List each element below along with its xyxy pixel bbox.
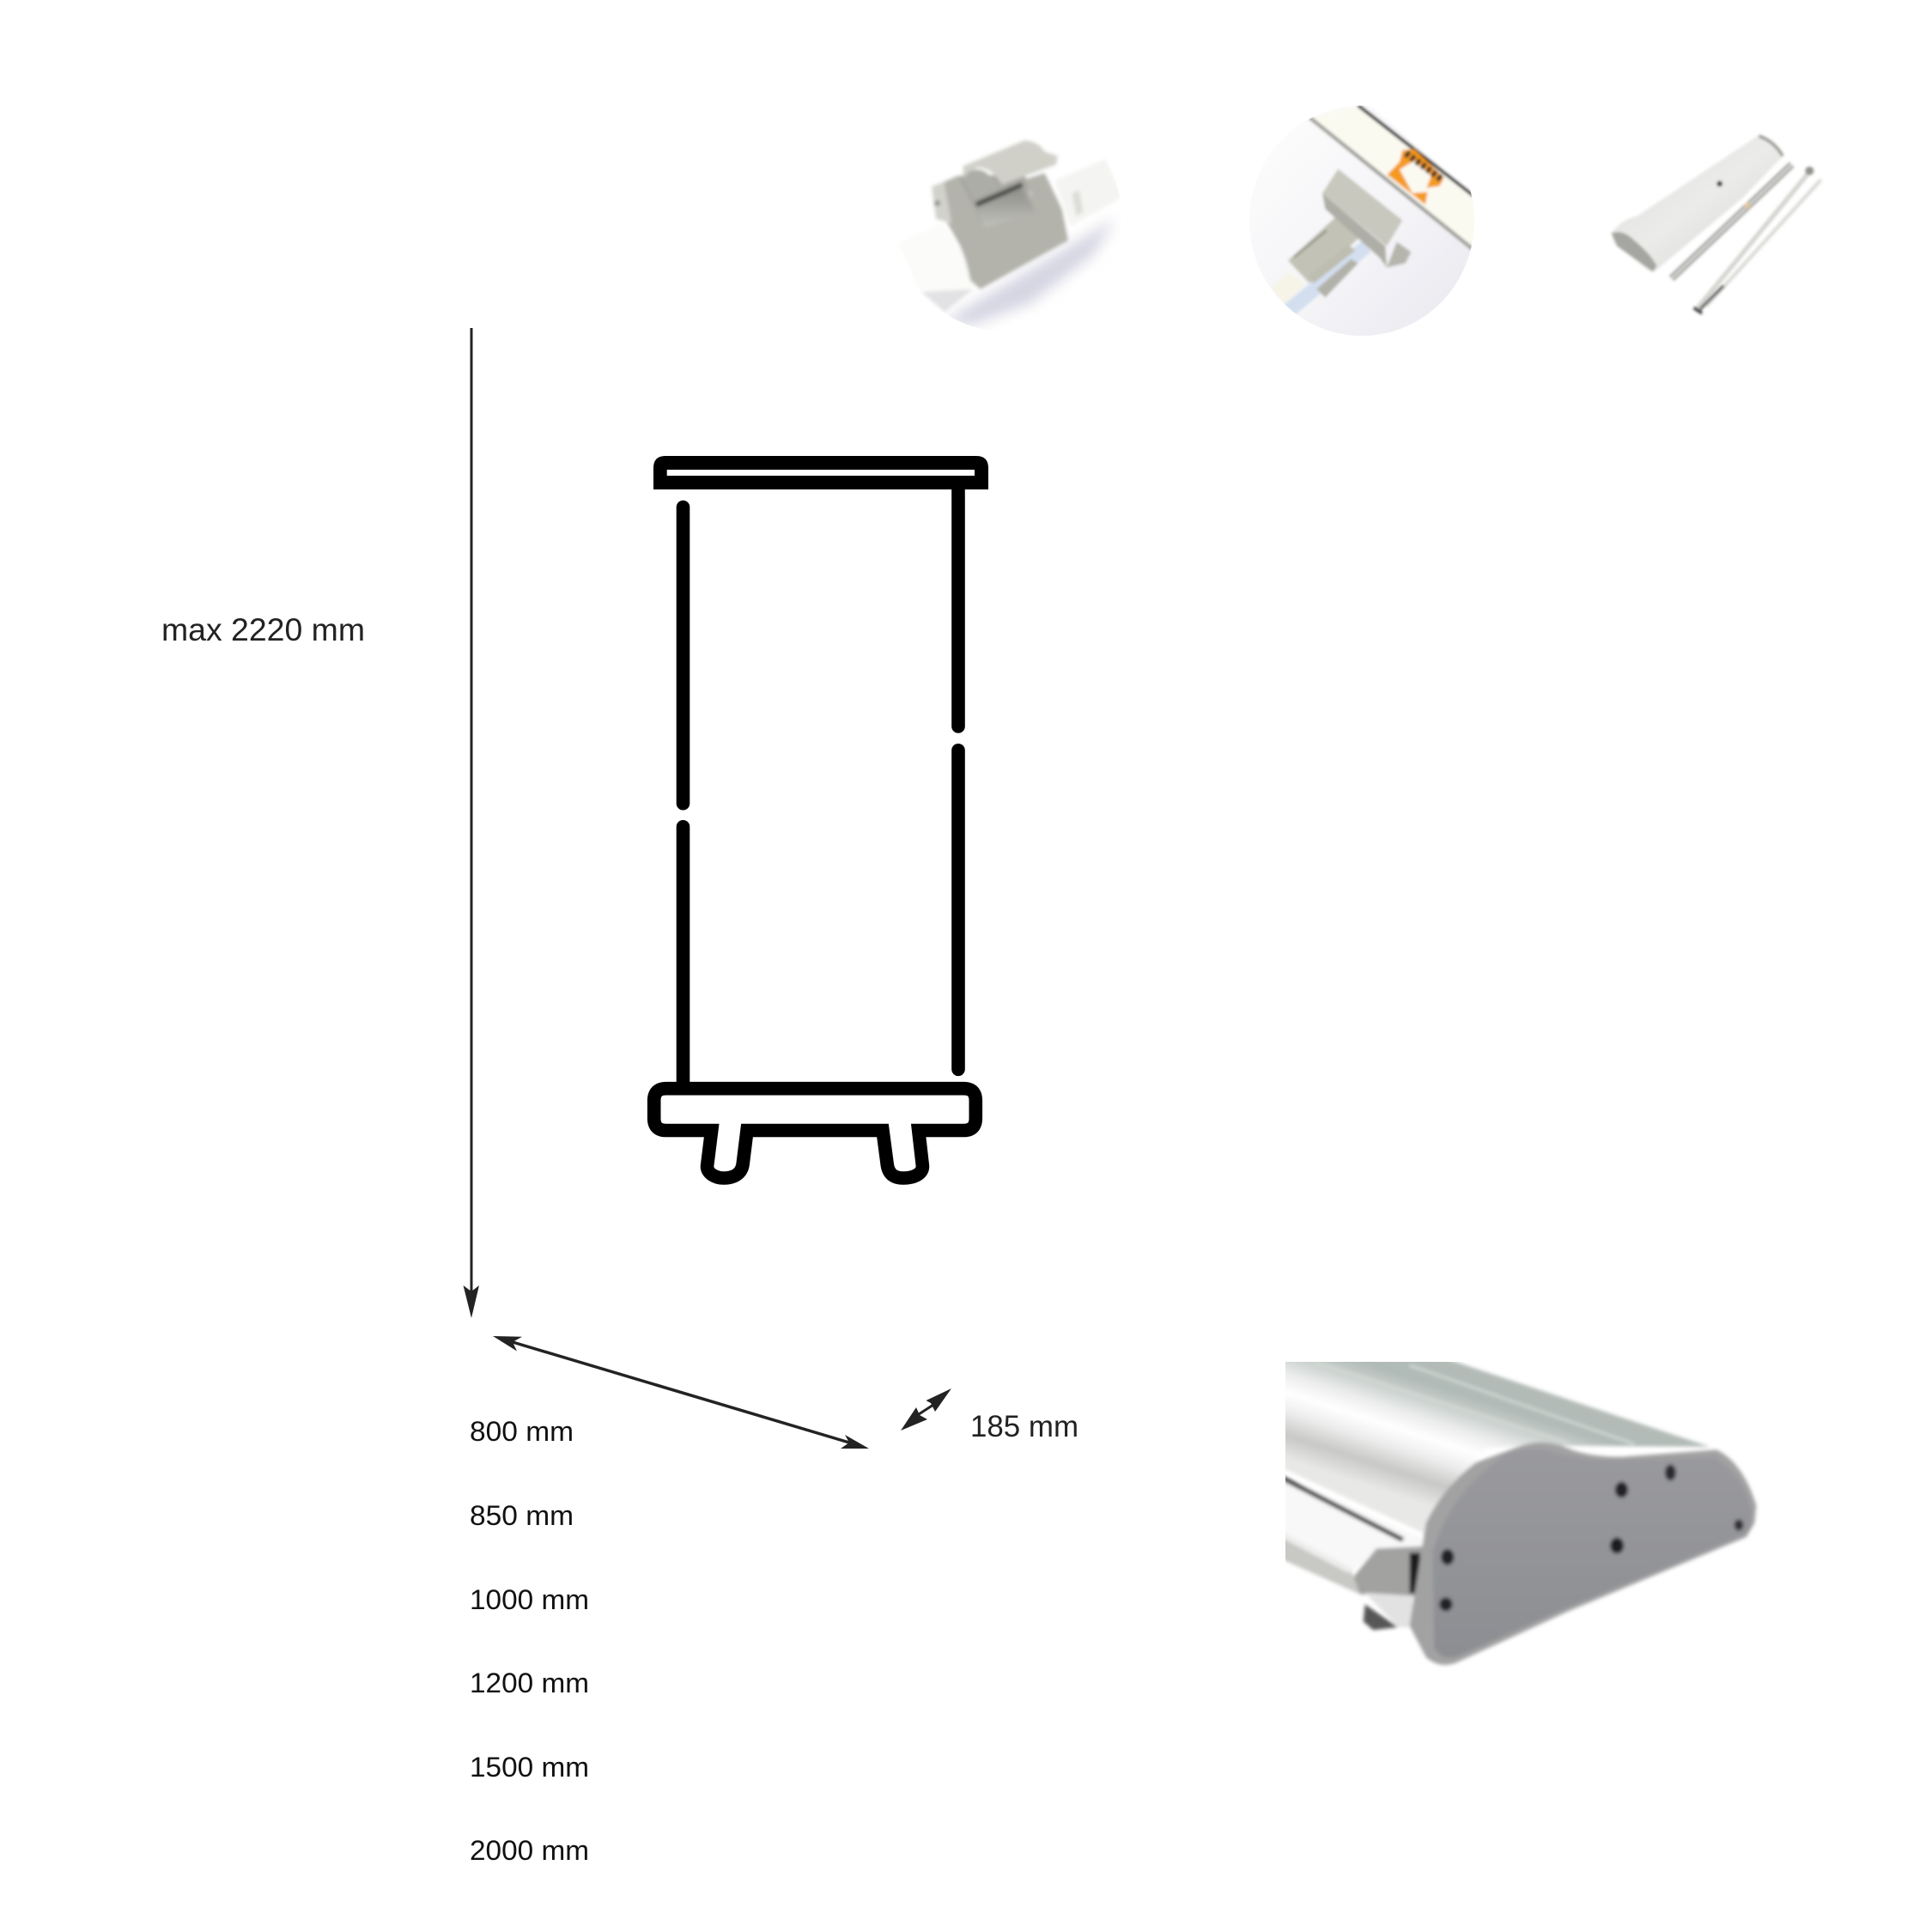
- white area beyond banner: [1411, 125, 1470, 192]
- left tube lower shade: [921, 289, 973, 312]
- clamp slot: [976, 185, 1023, 204]
- top rail: [653, 456, 988, 489]
- screw: [1615, 1482, 1628, 1498]
- width arrow: [493, 1336, 869, 1449]
- clamp window: [981, 189, 1025, 228]
- cassette body: [1285, 1362, 1709, 1533]
- height arrow: [464, 328, 479, 1318]
- hinge slot: [1410, 1552, 1420, 1594]
- lower rail: [1285, 1537, 1360, 1595]
- hinge piece: [1353, 1546, 1426, 1597]
- left pole lower: [677, 827, 690, 1086]
- pole dark end: [1693, 307, 1703, 315]
- end cap rim: [1410, 1443, 1756, 1665]
- orange sticker: [1388, 149, 1444, 204]
- lower channel: [1285, 1479, 1405, 1542]
- grey rail line: [1309, 118, 1479, 255]
- screw: [1735, 1519, 1743, 1531]
- cream tube: [1272, 273, 1305, 302]
- clamp window base: [957, 173, 1036, 211]
- clamp body: [932, 173, 1068, 289]
- end cap face: [1432, 1449, 1752, 1657]
- width option: 1500 mm: [470, 1752, 589, 1783]
- body highlight strips: [1410, 1364, 1635, 1446]
- clamp body: [1288, 216, 1363, 283]
- right pole lower: [951, 750, 965, 1069]
- depth label: 185 mm: [970, 1410, 1078, 1443]
- clamp top: [1322, 169, 1402, 246]
- screw: [1610, 1538, 1624, 1553]
- black banner edge: [1358, 106, 1474, 196]
- width option: 1000 mm: [470, 1584, 589, 1615]
- channel dark line: [1285, 1473, 1406, 1544]
- clamp back tab: [1387, 242, 1411, 268]
- width options list: [470, 1416, 589, 1866]
- clamp cap: [963, 140, 1058, 185]
- left pole upper: [677, 507, 690, 804]
- photo: base and pole kit: [1612, 136, 1821, 315]
- width option: 850 mm: [470, 1500, 574, 1531]
- tube shadow: [945, 217, 1116, 326]
- pole one: [1672, 165, 1792, 278]
- right pole upper: [951, 485, 965, 726]
- pole two: [1698, 172, 1809, 307]
- screw: [1439, 1597, 1453, 1611]
- screw: [1441, 1549, 1454, 1565]
- width option: 2000 mm: [470, 1835, 589, 1866]
- clamp side: [932, 182, 951, 223]
- cassette body: [1612, 136, 1783, 270]
- left tube: [899, 223, 985, 309]
- photo: pole clamp: [899, 140, 1122, 326]
- inner curve: [963, 167, 989, 178]
- cassette hole: [1716, 181, 1722, 186]
- photo: banner rail clip: [1267, 106, 1474, 336]
- cassette end cap: [1612, 232, 1656, 272]
- height label: max 2220 mm: [161, 612, 365, 647]
- width option: 1200 mm: [470, 1668, 589, 1698]
- cream banner strip: [1315, 108, 1474, 246]
- photo: aluminium cassette end: [1258, 1346, 1756, 1665]
- screw: [1665, 1465, 1676, 1480]
- pole three: [1706, 179, 1821, 307]
- width option: 800 mm: [470, 1416, 574, 1447]
- base with feet: [654, 1089, 975, 1178]
- banner stand icon: [653, 456, 988, 1178]
- foot: [1365, 1593, 1413, 1627]
- photo background: [1267, 106, 1470, 336]
- right tube: [1056, 161, 1120, 224]
- clamp front side: [1322, 193, 1387, 268]
- blue tube: [1284, 240, 1371, 315]
- roll-up banner specification diagram: [163, 106, 1822, 1860]
- depth arrow: [901, 1388, 951, 1431]
